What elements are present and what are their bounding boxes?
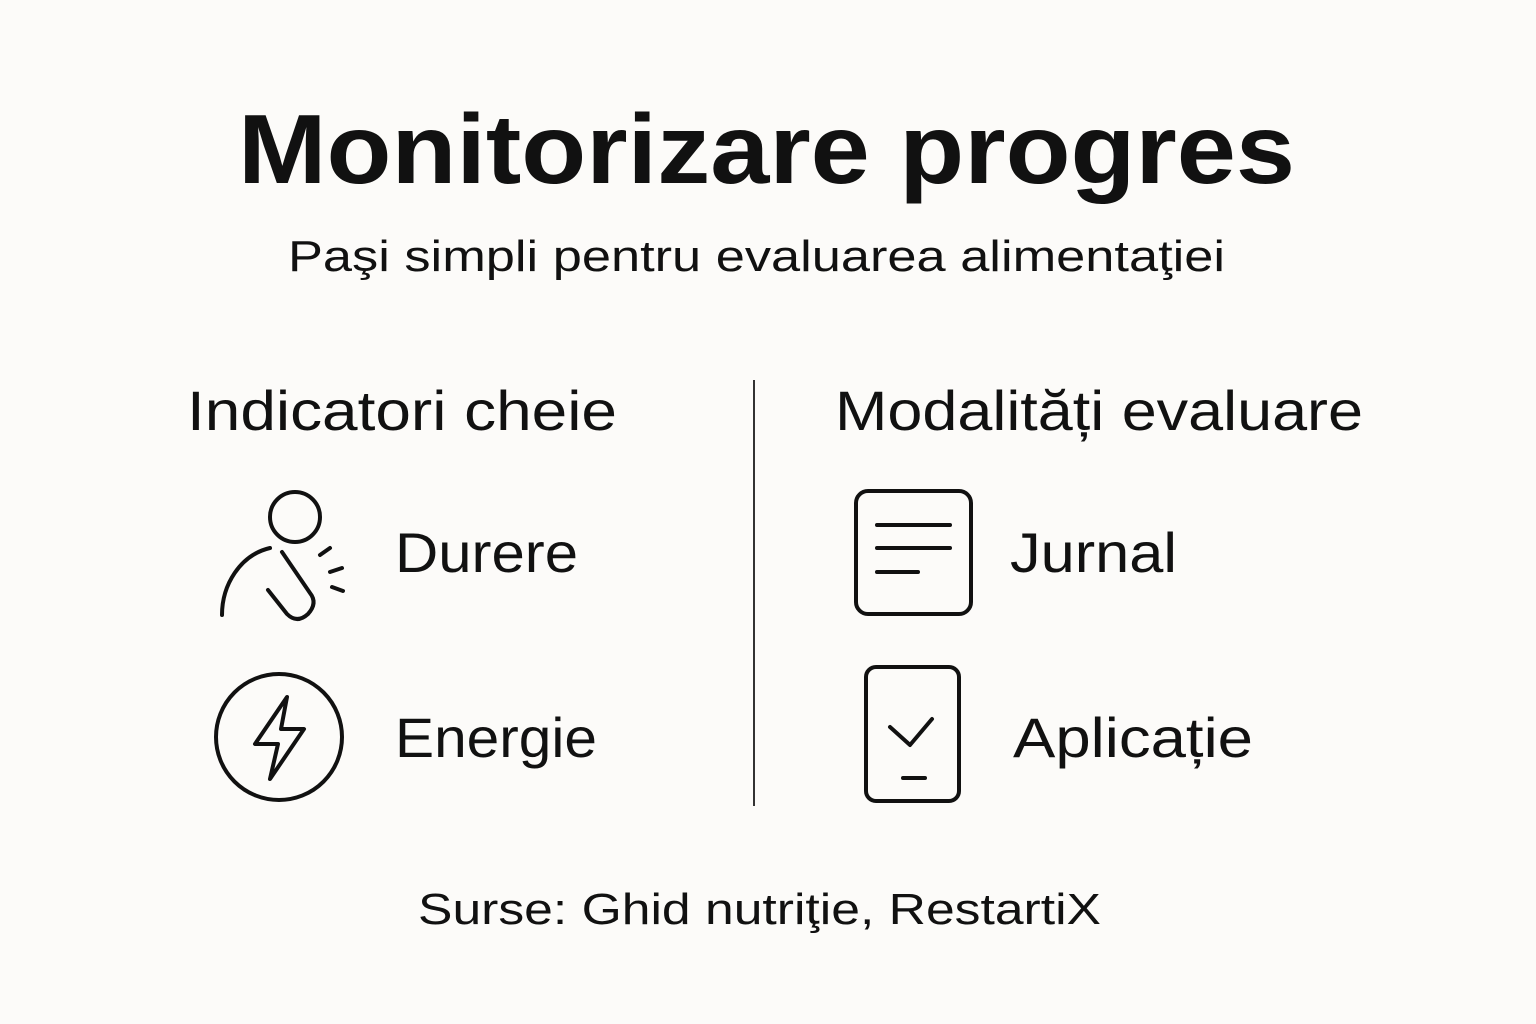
text: aplicatie: Aplicație xyxy=(1013,706,1253,769)
icon: energy xyxy=(216,674,342,800)
text: energie: Energie xyxy=(395,706,597,769)
sources: Surse: Ghid nutriţie, RestartiX xyxy=(418,885,1101,934)
title: Monitorizare progres xyxy=(238,94,1295,204)
heading: indicatori cheie: Indicatori cheie xyxy=(187,379,617,442)
icon: journal xyxy=(856,491,971,614)
subtitle: Paşi simpli pentru evaluarea alimentaţiei xyxy=(288,232,1225,281)
icon: phone app xyxy=(866,667,959,801)
icon: person pain xyxy=(222,492,343,619)
text: durere: Durere xyxy=(395,521,578,584)
heading: modalitati evaluare: Modalități evaluare xyxy=(835,379,1363,442)
text: jurnal: Jurnal xyxy=(1010,521,1177,584)
